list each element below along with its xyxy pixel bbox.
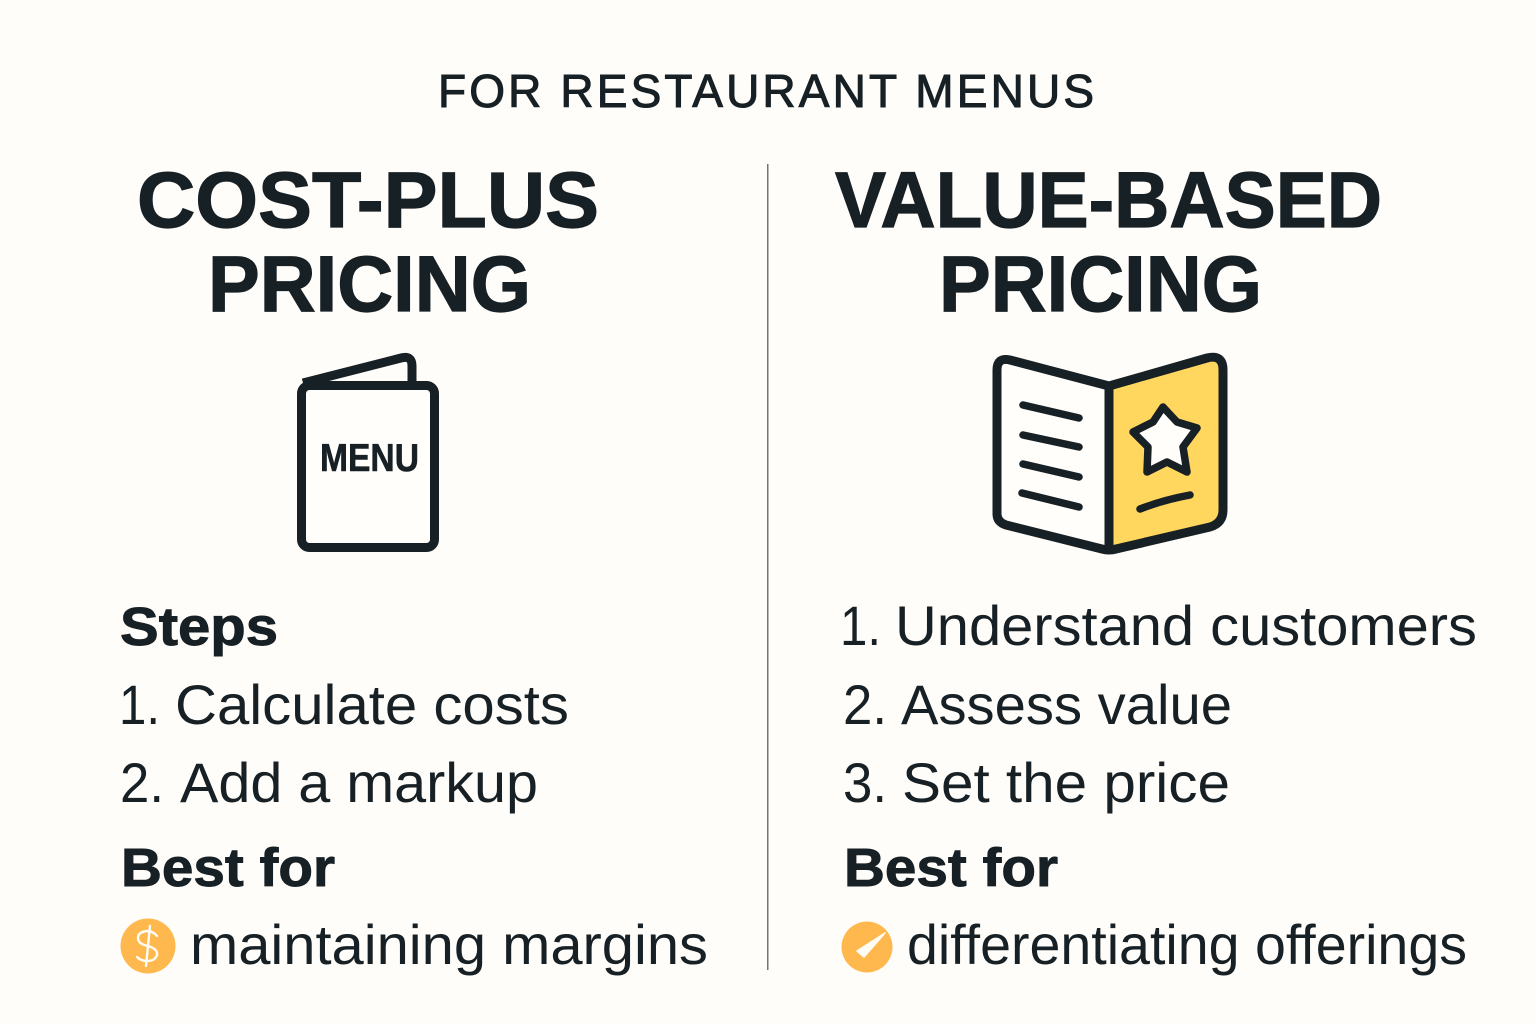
- step 1: 1.: [119, 673, 160, 736]
- step 1: Calculate costs: [175, 673, 569, 736]
- icon: closed menu: [302, 357, 434, 548]
- panel: value-based pricing: [835, 155, 1477, 976]
- heading: value-based pricing: [835, 155, 1382, 328]
- benefit text: maintaining margins: [190, 913, 708, 976]
- icon: gauge badge: [842, 922, 892, 972]
- heading: cost-plus pricing: COST-PLUS: [137, 155, 599, 244]
- icon: open menu with star: [997, 357, 1223, 550]
- step 3: 3.: [843, 751, 887, 814]
- step 2: Assess value: [901, 673, 1232, 736]
- panel: cost-plus pricing: [119, 155, 708, 976]
- step 1: Understand customers: [895, 594, 1477, 657]
- step 1: 1.: [840, 594, 881, 657]
- best for heading: Best for: [121, 838, 335, 898]
- icon: closed menu: MENU: [320, 437, 419, 480]
- icon: dollar coin: [120, 918, 176, 974]
- title: FOR RESTAURANT MENUS: [438, 65, 1094, 117]
- step 2: 2.: [843, 673, 887, 736]
- heading: cost-plus pricing: PRICING: [208, 239, 531, 328]
- heading: cost-plus pricing: [137, 155, 599, 328]
- divider: [767, 164, 768, 970]
- step 2: Add a markup: [180, 751, 538, 814]
- step 2: 2.: [120, 751, 164, 814]
- heading: value-based pricing: PRICING: [939, 239, 1262, 328]
- best for heading: Best for: [844, 838, 1058, 898]
- heading: value-based pricing: VALUE-BASED: [835, 155, 1382, 244]
- step 3: Set the price: [902, 751, 1230, 814]
- steps heading: Steps: [120, 597, 278, 657]
- benefit text: differentiating offerings: [907, 913, 1467, 976]
